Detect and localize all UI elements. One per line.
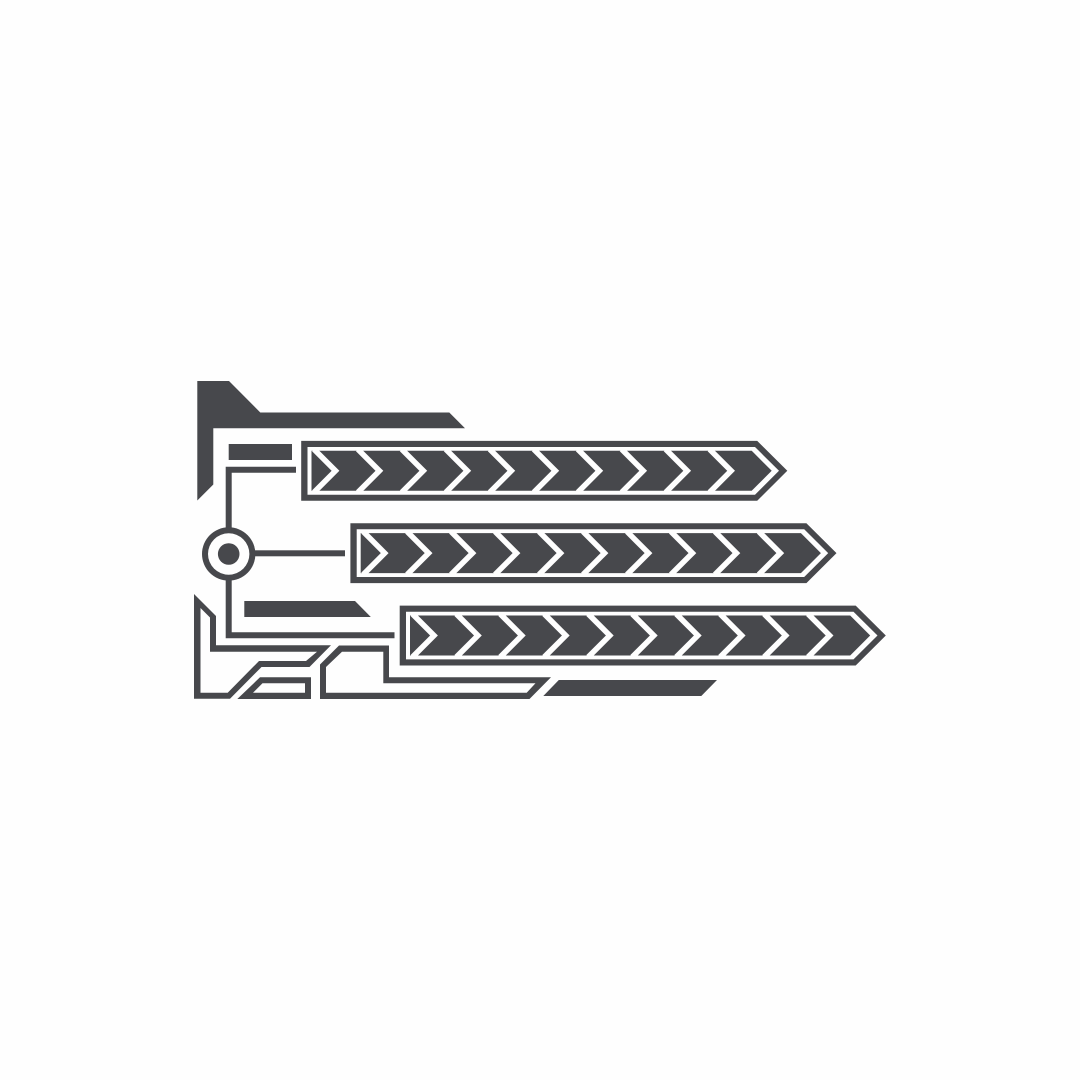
connector lines from hub to first and third bars bbox=[229, 470, 394, 635]
lower left outlined shape bbox=[194, 594, 331, 699]
long lower outlined shape bbox=[320, 646, 551, 699]
chevron bar 1 bbox=[301, 441, 787, 501]
bottom slanted bar bbox=[543, 680, 717, 696]
small top rectangle bbox=[229, 444, 292, 460]
small outlined parallelogram bbox=[237, 677, 311, 699]
slanted bar above third chevron bar bbox=[244, 601, 371, 617]
top bracket shape bbox=[197, 381, 465, 500]
hub circle icon bbox=[202, 527, 255, 581]
connector line from hub to second bar bbox=[250, 550, 345, 556]
chevron bar 3 bbox=[400, 606, 886, 666]
chevron bar 2 bbox=[350, 523, 836, 583]
